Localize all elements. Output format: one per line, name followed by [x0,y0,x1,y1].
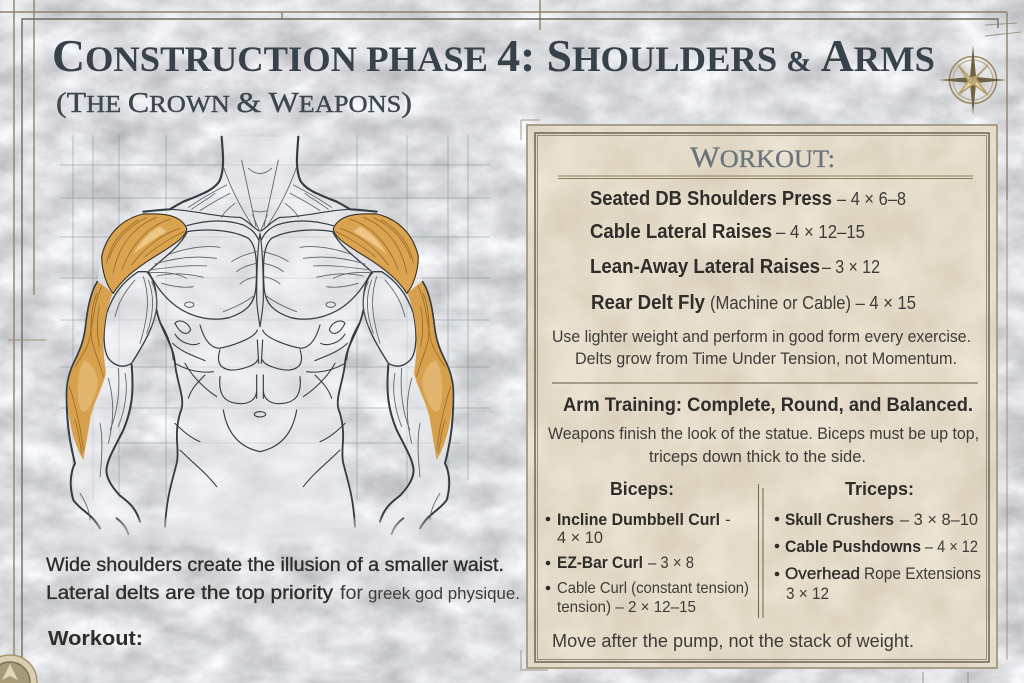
corner medallion icon [0,655,37,683]
triceps column: 3 × 12 [786,584,829,603]
shoulder exercise list: (Machine or Cable) – 4 × 15 [710,292,916,313]
delt tip text: Use lighter weight and perform in good form every exercise. [552,327,971,346]
caption text: Lateral delts are the top priority [46,583,334,604]
compass rose icon [939,45,1007,115]
torso left half [67,137,266,535]
biceps column: 4 × 10 [557,528,603,547]
shoulder exercise list: Rear Delt Fly [591,292,706,314]
blueprint grid [60,135,490,500]
triceps column: Rope Extensions [864,564,981,583]
arm training description: Weapons finish the look of the statue. Biceps must be up top, [548,424,979,443]
biceps column: Incline Dumbbell Curl [557,510,720,529]
biceps column: Cable Curl (constant tension) [557,580,749,597]
caption text: greek god physique. [368,584,520,603]
triceps column: – 4 × 12 [925,537,978,556]
biceps column: Biceps: [610,478,674,499]
shoulder exercise list: – 3 × 12 [822,256,880,277]
caption text [46,555,520,604]
biceps column: EZ-Bar Curl [557,553,643,572]
shoulder exercise list [590,188,916,314]
triceps column: – 3 × 8–10 [900,510,978,529]
triceps column: Cable Pushdowns [785,537,921,556]
arm training description: triceps down thick to the side. [649,447,866,466]
shoulder exercise list: Cable Lateral Raises [590,221,772,243]
triceps column: Overhead [785,564,860,583]
biceps column: - [725,510,731,529]
mist at base of figure [50,520,470,544]
panel: workout parchment [527,125,997,668]
closing note: Move after the pump, not the stack of weight. [552,631,914,651]
triceps column: Triceps: [845,478,914,499]
arm training heading: Arm Training: Complete, Round, and Balanced. [563,394,973,416]
shoulder exercise list: – 4 × 6–8 [837,188,906,209]
shoulder exercise list: Lean-Away Lateral Raises [590,256,820,278]
biceps column [546,478,749,616]
shoulder exercise list: – 4 × 12–15 [776,221,865,242]
delt tip text: Delts grow from Time Under Tension, not Momentum. [575,349,957,368]
delt tip text [552,327,971,368]
caption text: for [340,583,364,604]
panel heading: WORKOUT: [690,141,835,174]
caption text: Wide shoulders create the illusion of a smaller waist. [46,555,504,576]
biceps column: tension) – 2 × 12–15 [557,599,696,616]
torso right half [254,137,453,535]
shoulder exercise list: Seated DB Shoulders Press [590,188,832,210]
arm training description [548,424,979,466]
biceps column: – 3 × 8 [648,553,694,572]
triceps column: Skull Crushers [785,510,894,529]
title: CONSTRUCTION PHASE 4: SHOULDERS & ARMS [52,31,935,81]
triceps column [775,478,981,603]
anatomical torso illustration [67,137,453,535]
workout label: Workout: [48,628,143,650]
subtitle: (THE CROWN & WEAPONS ) [56,87,412,119]
